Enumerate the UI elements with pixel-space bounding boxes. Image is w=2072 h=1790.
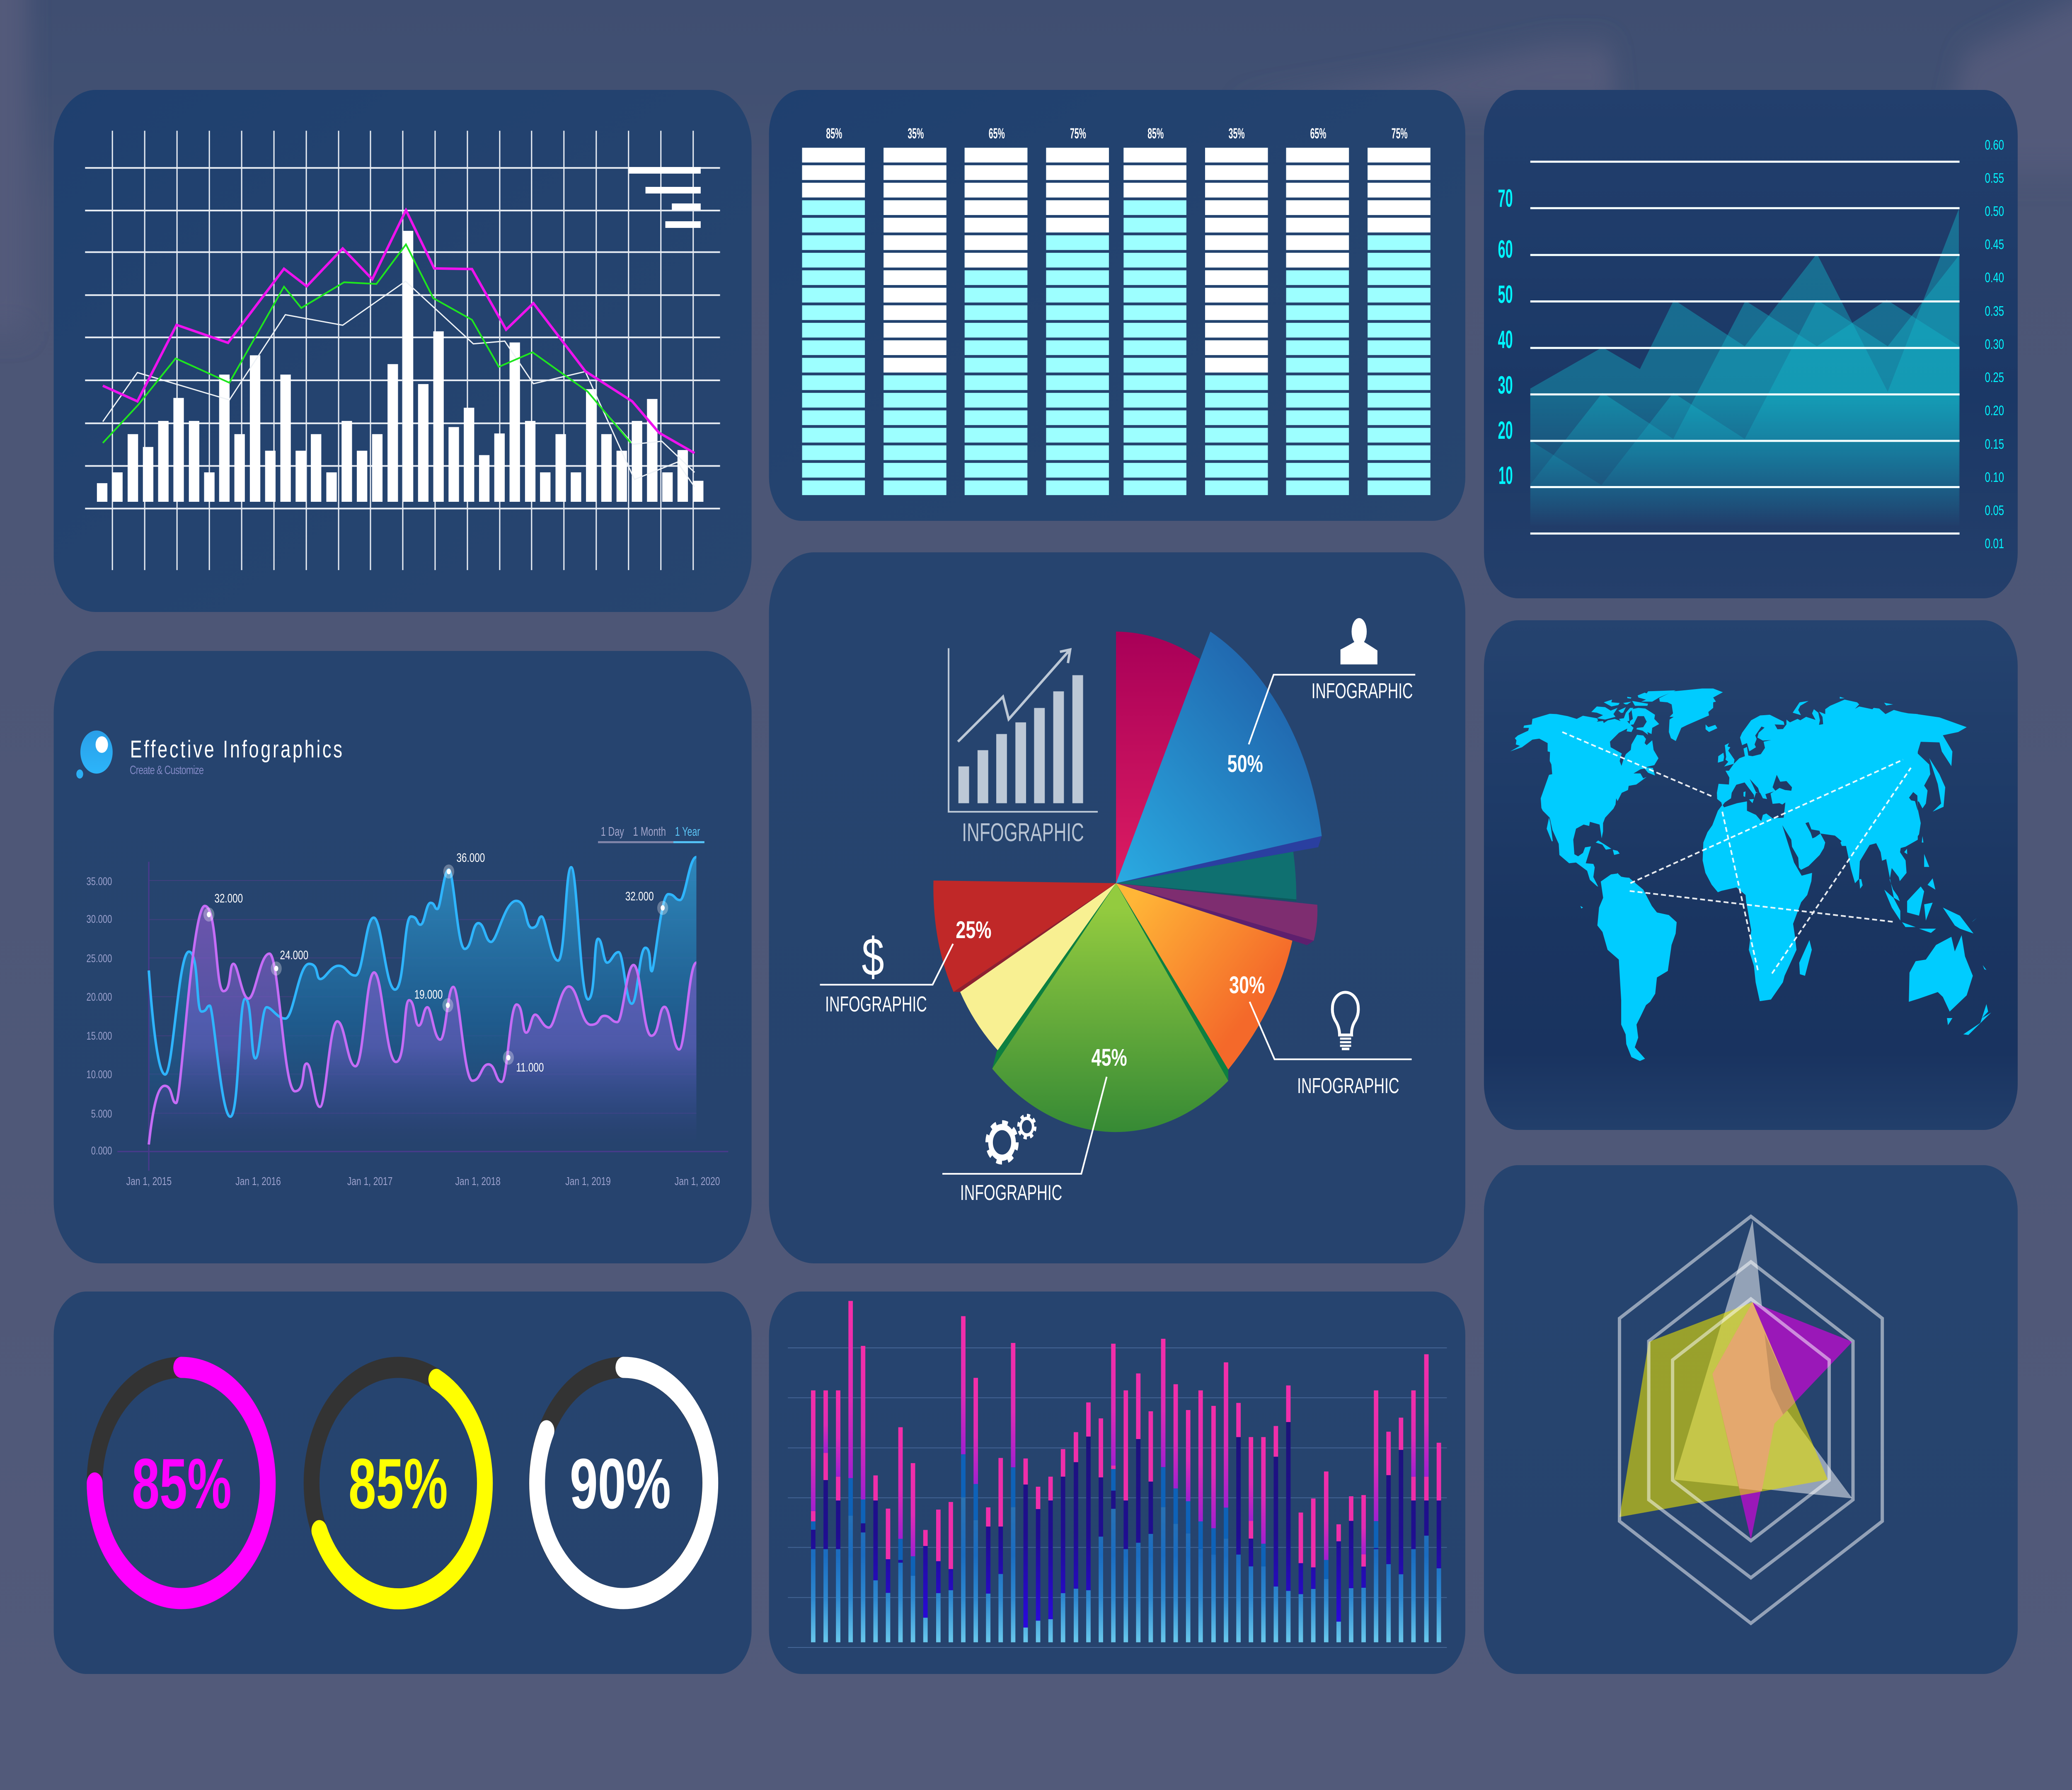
left axis labels: 70 [1498, 185, 1513, 213]
right axis labels: 0.40 [1985, 271, 2004, 285]
white trend lines [103, 281, 695, 487]
eurasia and africa mainland [1703, 699, 1918, 903]
column labels: 75% [1070, 125, 1086, 142]
right axis labels: 0.35 [1985, 304, 2004, 319]
mini chart icon [949, 648, 1098, 812]
northern south america [1605, 873, 1636, 887]
hexagon grid [1619, 1217, 1882, 1623]
purple series [1712, 1302, 1852, 1540]
ring: 85% yellow [312, 1367, 485, 1599]
south america [1598, 873, 1677, 1061]
chart axes [117, 862, 728, 1171]
white series [1674, 1220, 1852, 1498]
x axis labels: Jan 1, 2016 [235, 1175, 281, 1188]
data point labels: 32.000 [214, 891, 243, 905]
right axis labels: 0.50 [1985, 204, 2004, 219]
data point labels: 32.000 [625, 889, 654, 903]
column labels: 75% [1392, 125, 1408, 142]
time range tabs: 1 Day [601, 824, 624, 839]
grid, bars and trend lines [85, 131, 720, 570]
asia pacific islands [1581, 758, 1977, 934]
column labels: 35% [1229, 125, 1245, 142]
chart grid [149, 880, 696, 1113]
yellow series [1619, 1302, 1828, 1517]
y axis labels: 5.000 [91, 1108, 112, 1120]
left axis labels: 30 [1498, 372, 1513, 399]
navy segments [813, 1422, 1439, 1628]
level columns [833, 148, 1399, 495]
overlap regions [1712, 1302, 1795, 1491]
panel: world map [1484, 620, 2018, 1130]
panel: effective infographics area chart [54, 651, 752, 1263]
x axis labels: Jan 1, 2018 [455, 1175, 501, 1188]
magenta trend line [103, 210, 695, 453]
data point labels [214, 851, 654, 1074]
y axis labels: 35.000 [87, 875, 112, 888]
ring values [132, 1444, 671, 1524]
infographic labels: INFOGRAPHIC [960, 1180, 1062, 1205]
panel: progress rings [54, 1292, 752, 1674]
left axis labels [1498, 185, 1513, 490]
right axis labels: 0.15 [1985, 437, 2004, 452]
pink segments [813, 1374, 1439, 1569]
purple area [149, 906, 696, 1144]
iceland [1706, 724, 1717, 732]
slice percentages: 50% [1227, 750, 1263, 777]
white bars [102, 231, 698, 502]
panel: segmented level bars [769, 90, 1465, 521]
greenland [1659, 689, 1723, 741]
legend bars [629, 167, 701, 228]
y axis labels [87, 875, 112, 1157]
panel: stacked bars [769, 1292, 1465, 1674]
slice percentages: 25% [956, 917, 992, 943]
ring values: 85% [349, 1444, 448, 1524]
column labels: 35% [908, 125, 924, 142]
y axis labels: 10.000 [87, 1068, 112, 1081]
column labels: 65% [989, 125, 1005, 142]
column labels: 65% [1310, 125, 1326, 142]
radar shapes [1619, 1217, 1882, 1623]
right axis labels: 0.60 [1985, 138, 2004, 153]
dashed routes [1562, 732, 1911, 974]
left axis labels: 40 [1498, 326, 1513, 354]
north america and greenland [1510, 689, 1723, 887]
x axis labels: Jan 1, 2019 [565, 1175, 611, 1188]
data point markers [203, 864, 668, 1065]
baja california and caribbean [1547, 818, 1619, 855]
y axis labels: 25.000 [87, 952, 112, 965]
data point labels: 24.000 [280, 948, 308, 962]
line chart [117, 857, 728, 1171]
leader lines [820, 675, 1415, 1174]
icon: dollar: $ [862, 927, 884, 987]
australia and new zealand [1909, 935, 1991, 1035]
time range tabs: 1 Month [633, 824, 666, 839]
left axis labels: 10 [1498, 462, 1513, 490]
column labels: 85% [1147, 125, 1164, 142]
icon: light bulb [1332, 992, 1358, 1049]
right axis labels: 0.10 [1985, 470, 2004, 485]
area layers and grid lines [1530, 162, 1960, 534]
logo icon [76, 731, 113, 779]
infographic labels: INFOGRAPHIC [825, 992, 927, 1016]
sri lanka and hainan [1859, 849, 1907, 889]
mid blue segments [813, 1454, 1376, 1579]
slice percentages [956, 750, 1265, 1071]
ring values: 90% [570, 1444, 671, 1524]
right axis labels: 0.01 [1985, 537, 2004, 552]
title: Effective Infographics [130, 736, 342, 762]
left axis labels: 60 [1498, 236, 1513, 264]
x axis labels: Jan 1, 2020 [675, 1175, 720, 1188]
data point labels: 11.000 [516, 1060, 544, 1074]
x axis labels [126, 1175, 720, 1188]
slice percentages: 45% [1092, 1044, 1127, 1071]
infographic labels: INFOGRAPHIC [1312, 678, 1413, 703]
mediterranean, black sea and gulf [1723, 775, 1918, 838]
mediterranean islands [1743, 791, 1745, 797]
y axis labels: 0.000 [91, 1144, 112, 1157]
left axis labels: 20 [1498, 417, 1513, 445]
ring: 85% magenta [94, 1367, 268, 1599]
east asia [1914, 714, 1967, 840]
light blue base [813, 1497, 1439, 1642]
icon: person [1341, 618, 1377, 664]
right axis labels: 0.05 [1985, 503, 2004, 518]
stacked bar chart [788, 1301, 1447, 1647]
icon: gears [988, 1115, 1035, 1162]
pink to purple segments [811, 1301, 1428, 1560]
time range tabs [598, 824, 704, 843]
right axis labels: 0.55 [1985, 171, 2004, 186]
x axis labels: Jan 1, 2017 [347, 1175, 392, 1188]
right axis labels: 0.25 [1985, 370, 2004, 385]
right axis labels: 0.20 [1985, 404, 2004, 418]
y axis labels: 15.000 [87, 1030, 112, 1043]
panel: layered area chart [1484, 90, 2018, 598]
panel: radar chart [1484, 1165, 2018, 1674]
southern continents and pacific islands [1581, 714, 1991, 1061]
blue line [149, 857, 696, 1117]
pie slices [933, 631, 1322, 1132]
north america mainland [1510, 714, 1658, 887]
slice percentages: 30% [1229, 972, 1265, 998]
data point labels: 19.000 [414, 987, 443, 1001]
southern africa [1746, 901, 1801, 1001]
infographic labels: INFOGRAPHIC [962, 818, 1084, 847]
panel: pie chart [769, 552, 1465, 1263]
column labels: 85% [826, 125, 842, 142]
europe, asia and northern africa [1703, 697, 1918, 903]
right axis labels: 0.30 [1985, 337, 2004, 352]
y axis labels: 30.000 [87, 913, 112, 926]
data point labels: 36.000 [457, 851, 485, 865]
arctic russian islands [1793, 697, 1893, 715]
blue area [149, 857, 696, 1135]
purple line [149, 906, 696, 1144]
ring: 90% white [537, 1367, 710, 1599]
madagascar [1799, 940, 1812, 976]
infographic labels [825, 678, 1413, 1205]
subtitle: Create & Customize [130, 764, 204, 777]
panel: bar and line chart [54, 90, 752, 612]
arctic archipelago [1591, 690, 1676, 735]
right axis labels [1985, 138, 2004, 552]
right axis labels: 0.45 [1985, 237, 2004, 252]
x axis labels: Jan 1, 2015 [126, 1175, 172, 1188]
green trend line [103, 244, 631, 443]
infographic labels: INFOGRAPHIC [1297, 1073, 1399, 1098]
time range tabs: 1 Year [675, 824, 700, 839]
y axis labels: 20.000 [87, 991, 112, 1004]
left axis labels: 50 [1498, 281, 1513, 309]
britain and ireland [1718, 743, 1735, 767]
column labels [826, 125, 1408, 142]
ring values: 85% [132, 1444, 232, 1524]
